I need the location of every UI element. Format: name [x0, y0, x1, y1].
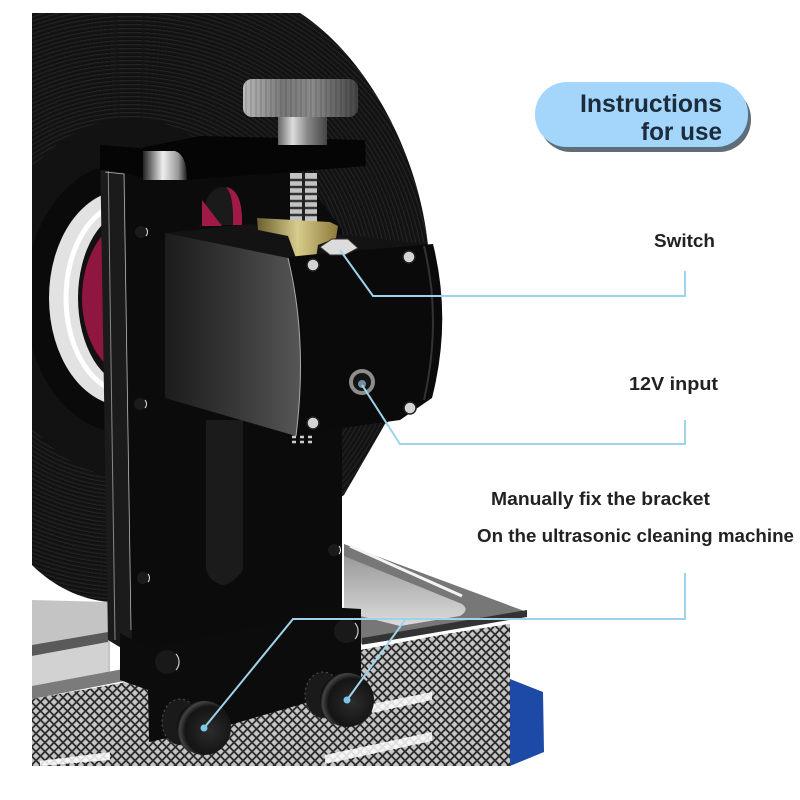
leader line: switch — [340, 250, 685, 296]
title text: Instructions — [580, 90, 722, 118]
vinyl record — [32, 13, 428, 602]
steel rim and basin — [344, 544, 527, 646]
tank left interior — [32, 600, 145, 699]
checkered tank front — [32, 622, 510, 766]
blue base — [510, 679, 544, 766]
box right face — [288, 244, 442, 434]
title text: for use — [641, 118, 722, 146]
small pins — [292, 437, 314, 442]
phillips screws — [307, 251, 416, 429]
box front face — [165, 233, 300, 436]
12V input jack — [349, 369, 375, 395]
left edge strip — [100, 145, 133, 655]
lower clamp — [120, 606, 361, 742]
right thumb knob — [305, 672, 374, 727]
ultrasonic cleaner tank — [32, 544, 544, 766]
brass switch mount — [257, 218, 338, 258]
plate opening with red label — [202, 187, 242, 226]
bracket — [100, 79, 442, 755]
vertical plate — [125, 172, 342, 650]
leader line: bracket knobs — [200, 573, 685, 732]
chrome highlight — [143, 151, 187, 180]
threaded screw — [290, 173, 317, 223]
title pill — [535, 82, 751, 152]
left thumb knob — [162, 699, 231, 755]
box top face — [165, 224, 433, 258]
label: switch: Switch — [654, 231, 715, 251]
lower slot — [206, 420, 243, 585]
record label and white ring — [32, 120, 190, 474]
label: on the machine: On the ultrasonic cleaning machine — [477, 526, 794, 546]
top arm — [100, 136, 366, 180]
chrome switch — [320, 239, 358, 255]
label: 12V input: 12V input — [629, 374, 718, 394]
light reflections on tank — [40, 692, 432, 766]
thumb screw knob — [243, 79, 358, 145]
label: fix the bracket: Manually fix the bracket — [491, 489, 710, 509]
leader line: 12V input — [362, 385, 685, 444]
plate bolts — [134, 226, 341, 584]
